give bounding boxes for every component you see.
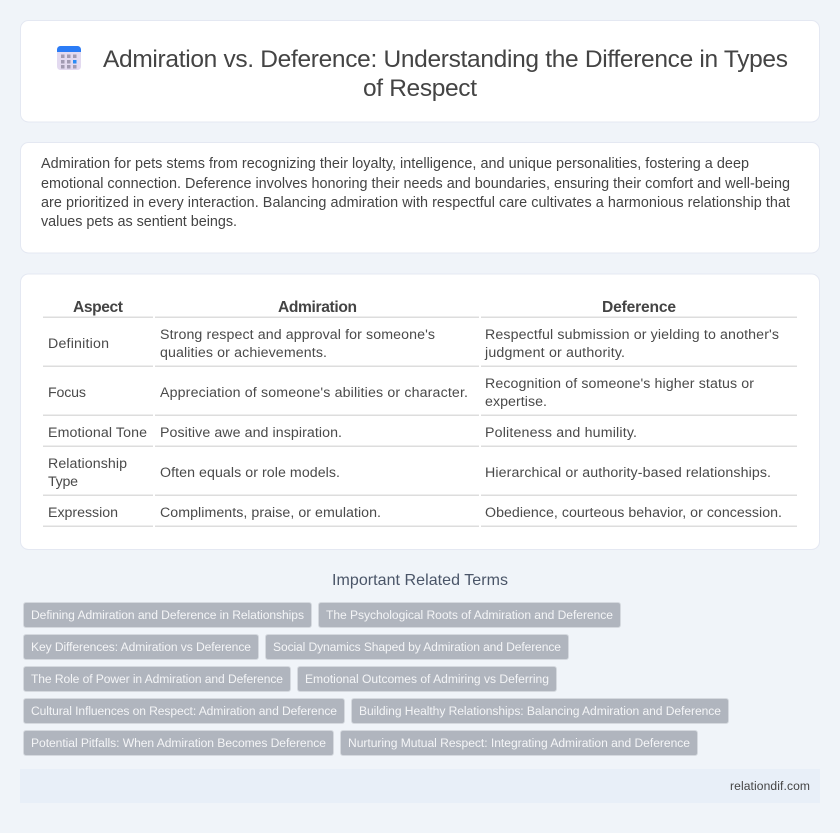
tag bbox=[266, 634, 568, 660]
tag: The Role of Power in Admiration and Deference bbox=[31, 672, 283, 686]
intro text: are prioritized in every interaction. Balancing admiration with respectful care cultivates a harmonious relationship that bbox=[41, 195, 790, 211]
footer: relationdif.com bbox=[730, 779, 810, 793]
tag bbox=[24, 666, 290, 692]
row: relationship type: Hierarchical or authority-based relationships. bbox=[485, 465, 771, 481]
table header: Admiration bbox=[278, 299, 357, 316]
table header: Deference bbox=[602, 299, 676, 316]
tag: Building Healthy Relationships: Balancing Admiration and Deference bbox=[359, 704, 721, 718]
intro text: emotional connection. Deference involves honoring their needs and boundaries, ensuring their comfort and well-being bbox=[41, 176, 790, 192]
row: expression: Compliments, praise, or emulation. bbox=[160, 505, 381, 521]
tag bbox=[352, 698, 728, 724]
footer bbox=[20, 769, 820, 803]
row: emotional tone: Positive awe and inspiration. bbox=[160, 425, 342, 441]
row: focus: expertise. bbox=[485, 394, 547, 410]
tag bbox=[24, 698, 344, 724]
row: focus bbox=[48, 376, 754, 410]
title: Admiration vs. Deference: Understanding the Difference in Types bbox=[103, 46, 788, 73]
tag bbox=[24, 602, 312, 628]
row: definition: Strong respect and approval for someone's bbox=[160, 327, 435, 343]
tag: Emotional Outcomes of Admiring vs Deferring bbox=[305, 672, 549, 686]
row: expression bbox=[48, 505, 782, 521]
tag bbox=[24, 634, 258, 660]
table header bbox=[73, 299, 676, 316]
tag: Key Differences: Admiration vs Deference bbox=[31, 640, 251, 654]
row: relationship type: Often equals or role models. bbox=[160, 465, 340, 481]
intro text bbox=[41, 156, 790, 230]
row: definition: Definition bbox=[48, 336, 109, 352]
row: emotional tone bbox=[48, 425, 637, 441]
row: relationship type: Type bbox=[48, 474, 78, 490]
tag: Defining Admiration and Deference in Relationships bbox=[31, 608, 304, 622]
panel: introduction bbox=[20, 142, 820, 253]
tag: Nurturing Mutual Respect: Integrating Admiration and Deference bbox=[348, 736, 690, 750]
related terms tags bbox=[24, 602, 728, 756]
row: relationship type bbox=[48, 456, 771, 490]
row: definition bbox=[48, 327, 779, 361]
row: expression: Expression bbox=[48, 505, 118, 521]
row: focus: Recognition of someone's higher status or bbox=[485, 376, 754, 392]
tag: Potential Pitfalls: When Admiration Becomes Deference bbox=[31, 736, 326, 750]
tag: Cultural Influences on Respect: Admiration and Deference bbox=[31, 704, 337, 718]
tag bbox=[340, 730, 698, 756]
heading: important related terms: Important Related Terms bbox=[332, 572, 508, 589]
tag: The Psychological Roots of Admiration and Deference bbox=[326, 608, 613, 622]
row: focus: Appreciation of someone's abilities or character. bbox=[160, 385, 468, 401]
row: definition: Respectful submission or yielding to another's bbox=[485, 327, 779, 343]
tag bbox=[24, 730, 334, 756]
panel: comparison table bbox=[20, 274, 820, 550]
row: emotional tone: Emotional Tone bbox=[48, 425, 147, 441]
tag bbox=[298, 666, 556, 692]
title bbox=[103, 46, 788, 102]
row: definition: judgment or authority. bbox=[484, 345, 625, 361]
tag: Social Dynamics Shaped by Admiration and Deference bbox=[273, 640, 561, 654]
tag bbox=[318, 602, 620, 628]
title: of Respect bbox=[363, 75, 477, 102]
header panel bbox=[20, 20, 820, 122]
intro text: Admiration for pets stems from recognizing their loyalty, intelligence, and unique personalities, fostering a deep bbox=[41, 156, 749, 172]
row: emotional tone: Politeness and humility. bbox=[485, 425, 637, 441]
row: relationship type: Relationship bbox=[48, 456, 127, 472]
row: focus: Focus bbox=[48, 385, 86, 401]
intro text: values pets as sentient beings. bbox=[41, 214, 237, 230]
row: definition: qualities or achievements. bbox=[160, 345, 327, 361]
table header: Aspect bbox=[73, 299, 123, 316]
row: expression: Obedience, courteous behavior, or concession. bbox=[485, 505, 782, 521]
icon: calendar bbox=[57, 46, 81, 70]
